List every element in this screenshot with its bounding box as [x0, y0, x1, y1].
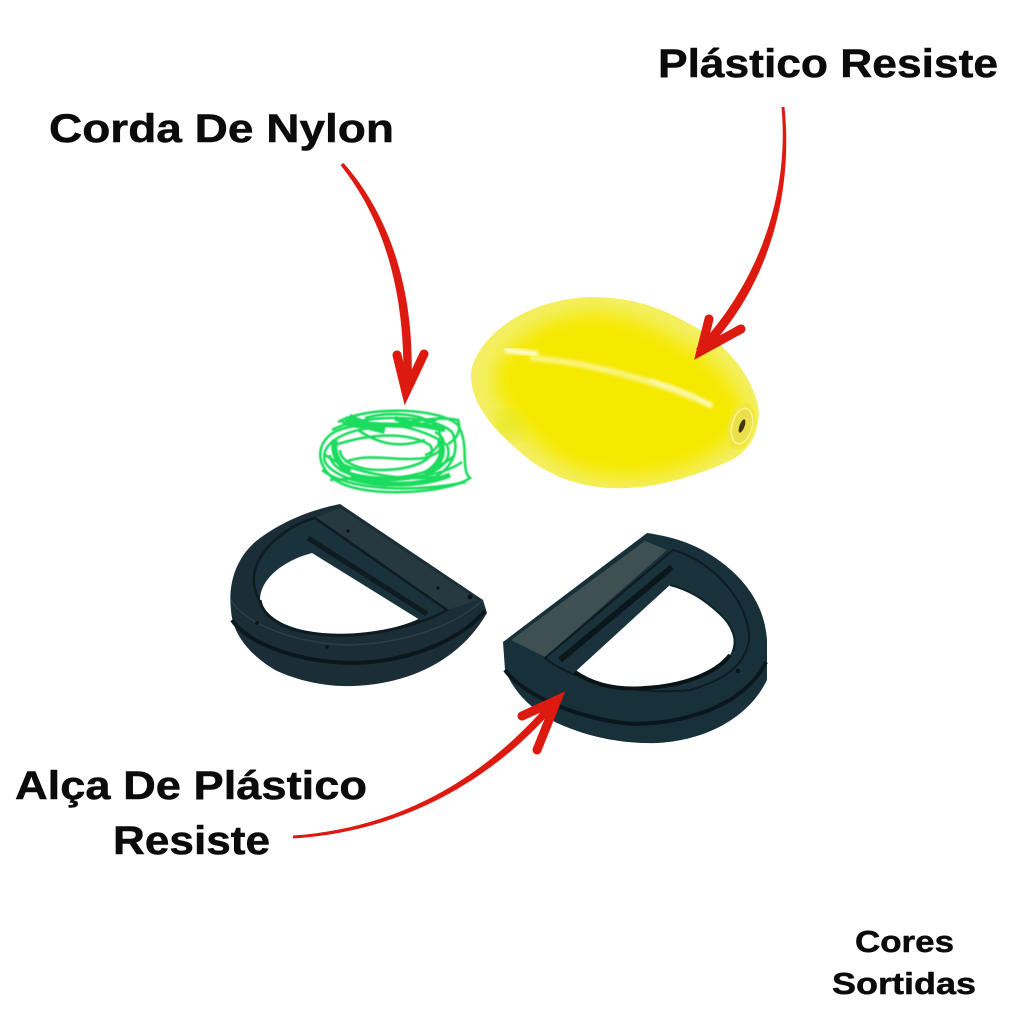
arrow: to handle: [293, 696, 561, 838]
arrow: to cord: [340, 163, 424, 392]
heading: Plástico Resiste: Plástico Resiste: [658, 42, 998, 86]
heading: Corda De Nylon: Corda De Nylon: [49, 107, 394, 151]
arrow: to float: [696, 107, 786, 355]
icon: yellow plastic float: [471, 297, 759, 488]
text: Cores Sortidas: [832, 924, 976, 1001]
text: Alça De Plástico Resiste: Alça De Plástico: [15, 764, 367, 808]
text: Cores Sortidas: Sortidas: [832, 966, 976, 1001]
text: Cores Sortidas: Cores: [855, 924, 954, 959]
text: Alça De Plástico Resiste: Resiste: [113, 819, 270, 863]
icon: right black D handle: [503, 533, 767, 743]
icon: left black D handle: [230, 504, 487, 686]
icon: green nylon cord: [320, 411, 470, 492]
text: Alça De Plástico Resiste: [15, 764, 367, 863]
